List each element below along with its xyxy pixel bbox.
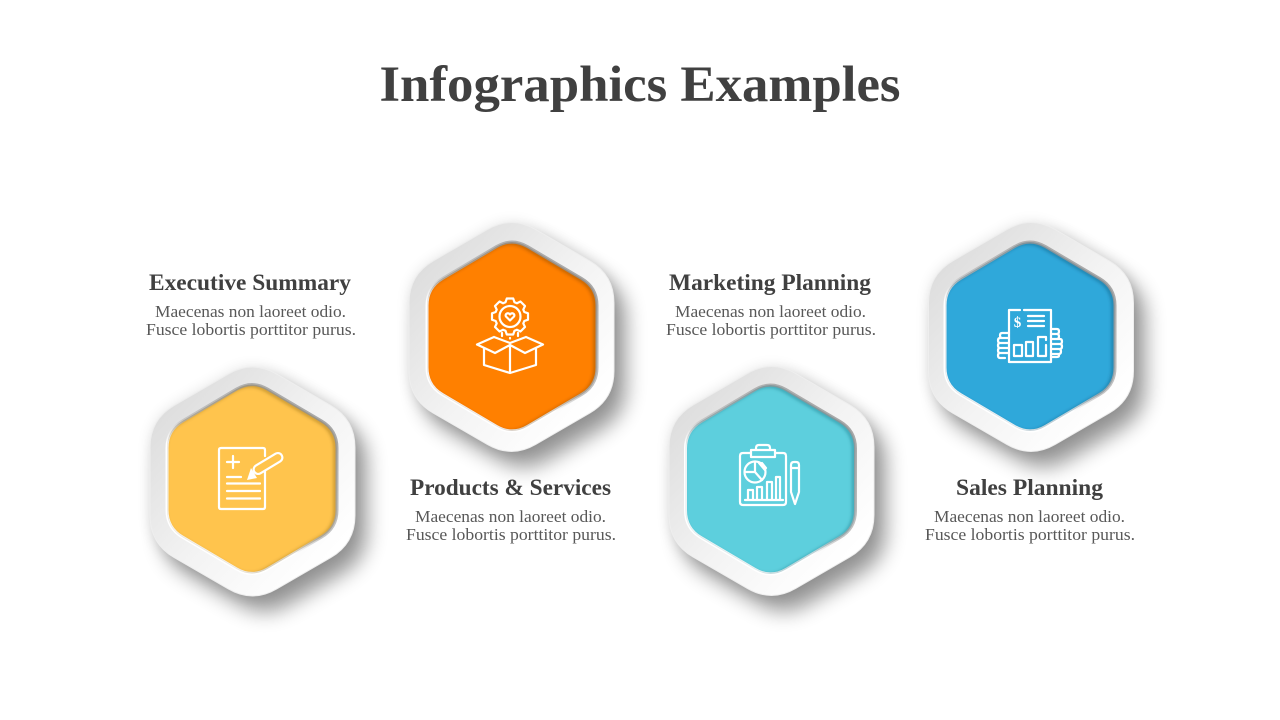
text block: marketing planning: Fusce lobortis porttitor purus. bbox=[666, 320, 876, 339]
text block: sales planning: Fusce lobortis porttitor purus. bbox=[925, 525, 1135, 544]
text block: products and services: Fusce lobortis porttitor purus. bbox=[406, 525, 616, 544]
text block: marketing planning bbox=[666, 302, 876, 339]
title: Infographics Examples bbox=[380, 57, 900, 113]
text block: executive summary: Maecenas non laoreet odio. bbox=[155, 302, 346, 321]
hexagon: teal bbox=[669, 367, 886, 611]
panel: products and services bbox=[406, 223, 626, 544]
panel: marketing planning bbox=[666, 270, 886, 611]
text block: executive summary: Fusce lobortis porttitor purus. bbox=[146, 320, 356, 339]
heading: products and services: Products & Services bbox=[410, 475, 611, 501]
icon: financial report with coins: $ bbox=[1014, 315, 1022, 331]
icon: document with pen bbox=[219, 448, 284, 509]
hexagon: yellow bbox=[150, 367, 367, 612]
heading: executive summary: Executive Summary bbox=[149, 270, 351, 296]
icon: financial report with coins bbox=[998, 310, 1062, 362]
text block: products and services bbox=[406, 507, 616, 544]
panel: sales planning bbox=[925, 223, 1146, 544]
text block: executive summary bbox=[146, 302, 356, 339]
hexagon: orange bbox=[409, 223, 626, 467]
text block: sales planning: Maecenas non laoreet odio. bbox=[934, 507, 1125, 526]
heading: marketing planning: Marketing Planning bbox=[669, 270, 871, 296]
hexagon: blue bbox=[928, 223, 1146, 467]
heading: sales planning: Sales Planning bbox=[956, 475, 1103, 501]
icon: clipboard with charts and pencil bbox=[740, 445, 799, 505]
panel: executive summary bbox=[146, 270, 367, 612]
text block: marketing planning: Maecenas non laoreet odio. bbox=[675, 302, 866, 321]
icon: gear and box bbox=[477, 298, 543, 373]
text block: products and services: Maecenas non laoreet odio. bbox=[415, 507, 606, 526]
text block: sales planning bbox=[925, 507, 1135, 544]
